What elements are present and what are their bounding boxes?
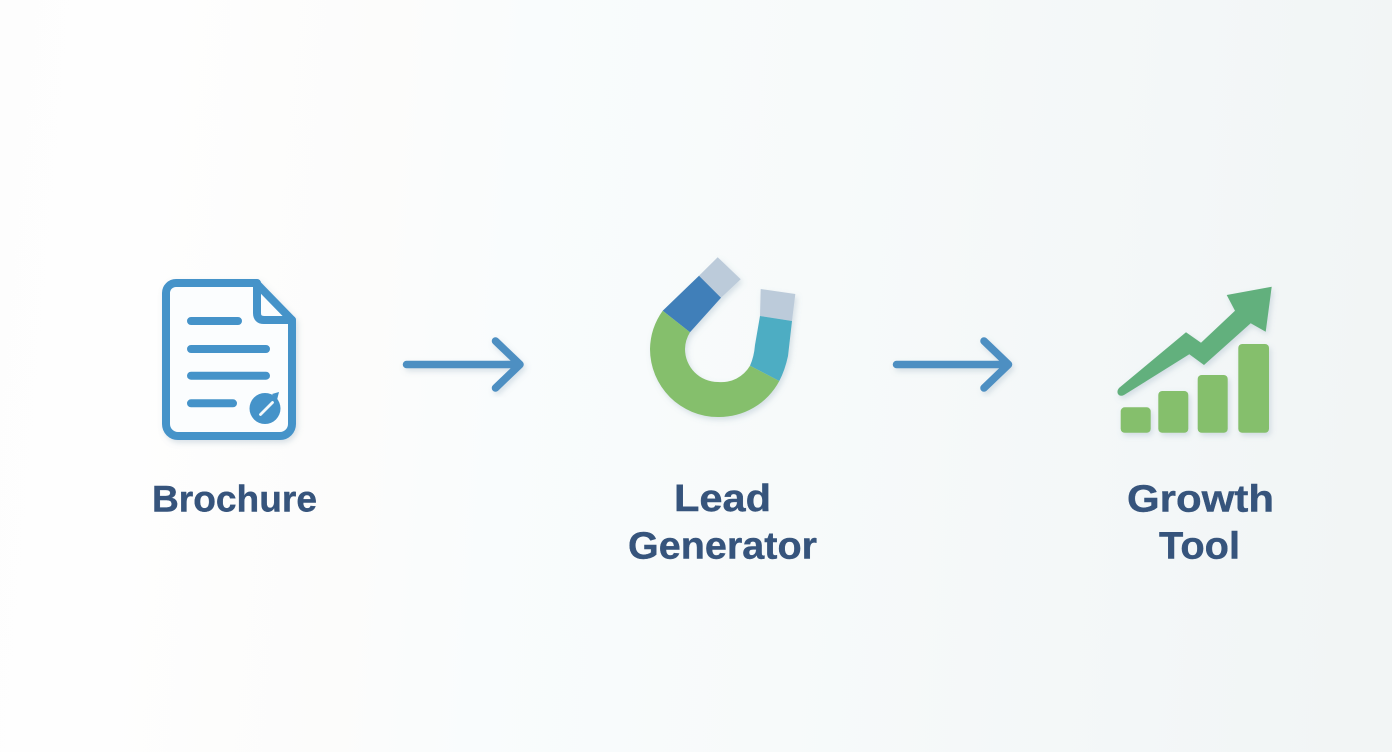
icon: growth chart: [1117, 287, 1272, 433]
bars: [1121, 344, 1269, 433]
label: Lead: Lead: [674, 478, 771, 520]
step 3: growth tool: [1117, 287, 1274, 568]
label: Tool: Tool: [1159, 526, 1240, 568]
icon: brochure document: [166, 283, 292, 436]
trend arrow: [1117, 287, 1272, 396]
icon: magnet: [650, 257, 795, 417]
step 2: lead generator: [628, 257, 817, 568]
label: Growth: Growth: [1127, 478, 1274, 520]
label: Brochure: Brochure: [152, 478, 317, 520]
label: Generator: Generator: [628, 526, 817, 568]
arrow: brochure to lead generator: [406, 341, 520, 388]
step 1: brochure: [152, 283, 317, 520]
arrow: lead generator to growth tool: [896, 341, 1008, 388]
